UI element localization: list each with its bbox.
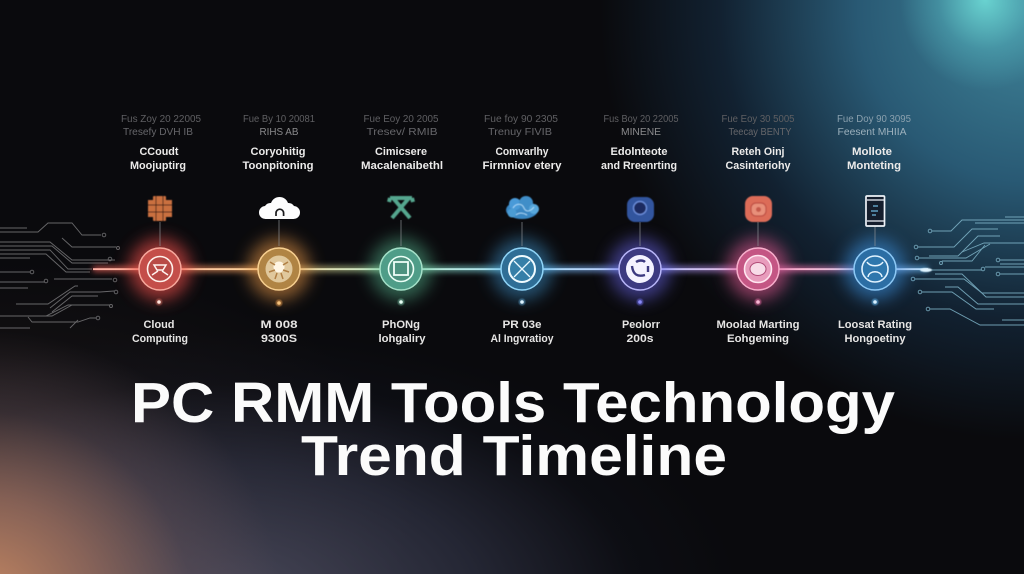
lower labels: lohgaliry bbox=[378, 333, 426, 345]
lower labels: M 008 bbox=[260, 319, 298, 331]
second line labels: RIHS AB bbox=[260, 127, 299, 138]
icon 6: coral rounded square bbox=[745, 196, 772, 222]
second line labels: Trenuy FIVIB bbox=[488, 127, 552, 138]
upper headings: Reteh Oinj bbox=[732, 146, 784, 158]
lower labels: Cloud bbox=[144, 319, 174, 331]
upper headings: Coryohitig bbox=[250, 146, 306, 158]
lower labels: Computing bbox=[132, 333, 188, 345]
lower labels: Loosat Rating bbox=[838, 319, 912, 331]
top date labels: Fus Boy 20 22005 bbox=[604, 114, 679, 125]
circuit traces: right bbox=[911, 217, 1024, 325]
node 1: red bbox=[129, 238, 191, 300]
title bbox=[131, 371, 895, 488]
second line labels: Tresefy DVH IB bbox=[123, 127, 193, 138]
upper headings: Edolnteote bbox=[610, 146, 668, 158]
top date labels: Fue Eoy 30 5005 bbox=[722, 114, 795, 125]
upper headings: Comvarlhy bbox=[496, 146, 549, 158]
icon 4: blue cloud brain bbox=[506, 196, 539, 219]
stems bbox=[160, 220, 875, 246]
node 3: green bbox=[370, 238, 432, 300]
node 4: cyan blue bbox=[491, 238, 553, 300]
second line labels: Teecay BENTY bbox=[728, 127, 792, 138]
top date labels: Fus Zoy 20 22005 bbox=[121, 114, 201, 125]
lower labels: Eohgeming bbox=[727, 333, 789, 345]
node 2: amber bbox=[248, 238, 310, 300]
top date labels: Fue Eoy 20 2005 bbox=[364, 114, 439, 125]
upper headings: and Rreenrting bbox=[601, 160, 677, 172]
top date labels bbox=[121, 114, 911, 125]
node 6: pink bbox=[727, 238, 789, 300]
top date labels: Fue foy 90 2305 bbox=[484, 114, 558, 125]
lower labels: Hongoetiny bbox=[844, 333, 906, 345]
lower labels: Peolorr bbox=[622, 319, 661, 331]
circuit traces: left bbox=[0, 223, 120, 328]
icon 5: blue rounded hex bbox=[627, 197, 654, 222]
second line labels: MINENE bbox=[621, 127, 661, 138]
icon 7: phone bbox=[866, 196, 884, 226]
upper headings: Macalenaibethl bbox=[361, 160, 443, 172]
node 5: violet bbox=[609, 238, 671, 300]
lower labels: 200s bbox=[626, 333, 654, 345]
title: Trend Timeline bbox=[301, 424, 727, 488]
dots bbox=[156, 298, 878, 306]
upper headings: Cimicsere bbox=[375, 146, 427, 158]
lower labels: PhONg bbox=[382, 319, 420, 331]
icon 1: orange chip bbox=[148, 196, 172, 221]
upper headings: CCoudt bbox=[140, 146, 179, 158]
lower labels: Moolad Marting bbox=[716, 319, 800, 331]
upper headings: Toonpitoning bbox=[242, 160, 314, 172]
second line labels: Feesent MHIIA bbox=[838, 127, 907, 138]
upper headings bbox=[130, 146, 901, 172]
upper headings: Monteting bbox=[847, 160, 901, 172]
upper headings: Casinteriohy bbox=[726, 160, 791, 172]
top date labels: Fue By 10 20081 bbox=[243, 114, 315, 125]
lower labels: Al Ingvratioy bbox=[490, 333, 554, 345]
icon 2: white cloud bbox=[259, 197, 300, 219]
timeline line bbox=[93, 266, 932, 272]
icon 3: green cross bbox=[389, 198, 413, 218]
top date labels: Fue Doy 90 3095 bbox=[837, 114, 911, 125]
title: PC RMM Tools Technology bbox=[131, 371, 895, 435]
second line labels: Tresev/ RMIB bbox=[366, 127, 438, 138]
lower labels bbox=[132, 319, 912, 345]
node 7: blue bbox=[844, 238, 906, 300]
lower labels: 9300S bbox=[261, 333, 297, 345]
second line labels bbox=[123, 127, 907, 138]
upper headings: Moojuptirg bbox=[130, 160, 186, 172]
lower labels: PR 03e bbox=[502, 319, 542, 331]
upper headings: Mollote bbox=[852, 146, 892, 158]
upper headings: Firmniov etery bbox=[482, 160, 562, 172]
